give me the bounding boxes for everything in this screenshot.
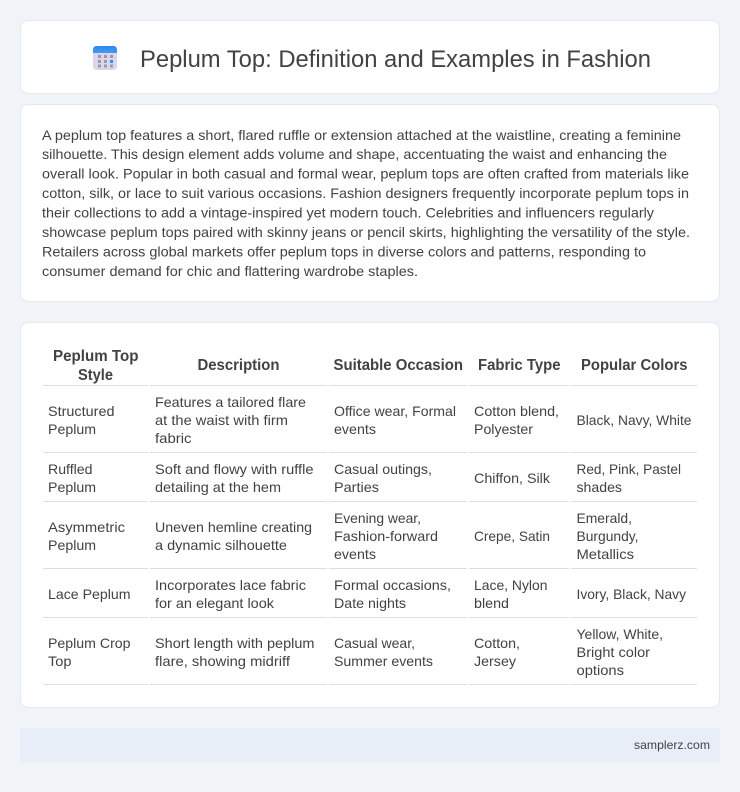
table row: Asymmetric Peplum: Evening wear,: [334, 510, 421, 526]
table row: Peplum Crop Top: Summer events: [334, 653, 433, 669]
table row: Lace Peplum: Lace, Nylon: [474, 577, 548, 593]
table row: Structured Peplum: fabric: [155, 430, 192, 446]
table row: Structured Peplum: at the waist with firm: [155, 412, 288, 428]
panel: comparison table: [20, 322, 720, 708]
footer bar: [20, 728, 720, 762]
table row: Ruffled Peplum: shades: [576, 479, 622, 495]
table row: Lace Peplum: for an elegant look: [155, 595, 275, 611]
table row: Peplum Crop Top: Bright color: [576, 644, 650, 660]
column heading: Peplum Top Style: Style: [78, 367, 113, 384]
table row: Peplum Crop Top: flare, showing midriff: [155, 653, 290, 669]
table row: Asymmetric Peplum: a dynamic silhouette: [155, 537, 287, 553]
table header row: [53, 348, 688, 384]
text block: description: their collections to add a vintage-inspired yet modern touch. Celebrities and influencers regularly: [42, 204, 654, 220]
table row: Structured Peplum: Office wear, Formal: [334, 403, 456, 419]
text block: description: [42, 127, 690, 279]
column heading: Fabric Type: Fabric Type: [478, 357, 561, 374]
table row: Ruffled Peplum: Casual outings,: [334, 461, 432, 477]
table row: Asymmetric Peplum: Metallics: [576, 546, 634, 562]
table row: Ruffled Peplum: detailing at the hem: [155, 479, 281, 495]
table row: Asymmetric Peplum: Peplum: [48, 537, 96, 553]
table row: Asymmetric Peplum: Burgundy,: [576, 528, 638, 544]
table row: Lace Peplum: Date nights: [334, 595, 406, 611]
table row: Ruffled Peplum: Red, Pink, Pastel: [576, 461, 681, 477]
table row: Structured Peplum: Polyester: [474, 421, 533, 437]
title: Peplum Top: Definition and Examples in Fashion: [140, 46, 651, 73]
footer source text: samplerz.com: [634, 738, 710, 752]
table row: Peplum Crop Top: Yellow, White,: [576, 626, 663, 642]
text block: description: Retailers across global markets offer peplum tops in diverse colors and patterns, responding to: [42, 244, 646, 260]
table row: Ruffled Peplum: Parties: [334, 479, 379, 495]
table row: Peplum Crop Top: Top: [48, 653, 72, 669]
table row: Peplum Crop Top: Jersey: [474, 653, 516, 669]
table row: Peplum Crop Top: Peplum Crop: [48, 635, 131, 651]
column heading: Peplum Top Style: [53, 348, 139, 384]
table row: Structured Peplum: [48, 394, 692, 446]
table row: Asymmetric Peplum: Crepe, Satin: [474, 528, 550, 544]
text block: description: showcase peplum tops paired with skinny jeans or pencil skirts, highlighting the versatility of the style.: [42, 224, 690, 240]
text block: description: overall look. Popular in both casual and formal wear, peplum tops are often crafted from materials like: [42, 166, 689, 182]
table row: Asymmetric Peplum: [48, 510, 638, 562]
table row: Structured Peplum: Black, Navy, White: [576, 412, 692, 428]
table row: Structured Peplum: Peplum: [48, 421, 96, 437]
text block: description: silhouette. This design element adds volume and shape, accentuating the waist and enhancing the: [42, 146, 667, 162]
table row: Lace Peplum: Incorporates lace fabric: [155, 577, 306, 593]
table row: Peplum Crop Top: Casual wear,: [334, 635, 415, 651]
text block: description: consumer demand for chic and flattering wardrobe staples.: [42, 263, 418, 279]
table row: Peplum Crop Top: Cotton,: [474, 635, 520, 651]
table row: Structured Peplum: Features a tailored flare: [155, 394, 306, 410]
column heading: Popular Colors: Popular Colors: [581, 357, 688, 374]
table row: Ruffled Peplum: Chiffon, Silk: [474, 470, 551, 486]
text block: description: cotton, silk, or lace to suit various occasions. Fashion designers frequently incorporate peplum tops in: [42, 185, 689, 201]
table row: Asymmetric Peplum: Asymmetric: [48, 519, 125, 535]
table row: Asymmetric Peplum: events: [334, 546, 376, 562]
panel: title header: [20, 20, 720, 94]
table row: Lace Peplum: Ivory, Black, Navy: [576, 586, 686, 602]
column heading: Suitable Occasion: Suitable Occasion: [334, 357, 463, 374]
table row: Ruffled Peplum: Soft and flowy with ruffle: [155, 461, 314, 477]
table row: Peplum Crop Top: [48, 626, 663, 678]
table row: Structured Peplum: events: [334, 421, 376, 437]
table row: Lace Peplum: Formal occasions,: [334, 577, 451, 593]
panel: intro paragraph: [20, 104, 720, 302]
column heading: Description: Description: [198, 357, 280, 374]
table row: Lace Peplum: blend: [474, 595, 509, 611]
table row: Lace Peplum: Lace Peplum: [48, 586, 130, 602]
table row: Ruffled Peplum: Ruffled: [48, 461, 92, 477]
table row: Structured Peplum: Structured: [48, 403, 114, 419]
table row: Asymmetric Peplum: Emerald,: [576, 510, 632, 526]
table row: Structured Peplum: Cotton blend,: [474, 403, 559, 419]
table row: Peplum Crop Top: options: [576, 662, 624, 678]
table row: Ruffled Peplum: [48, 461, 681, 495]
table row: Peplum Crop Top: Short length with peplum: [155, 635, 314, 651]
table row: Lace Peplum: [48, 577, 686, 611]
text block: description: A peplum top features a short, flared ruffle or extension attached at the waistline, creating a feminine: [42, 127, 681, 143]
table row: Asymmetric Peplum: Fashion-forward: [334, 528, 438, 544]
icon: calendar: [93, 46, 117, 70]
table row: Asymmetric Peplum: Uneven hemline creating: [155, 519, 312, 535]
table row: Ruffled Peplum: Peplum: [48, 479, 96, 495]
column heading: Peplum Top Style: Peplum Top: [53, 348, 139, 365]
